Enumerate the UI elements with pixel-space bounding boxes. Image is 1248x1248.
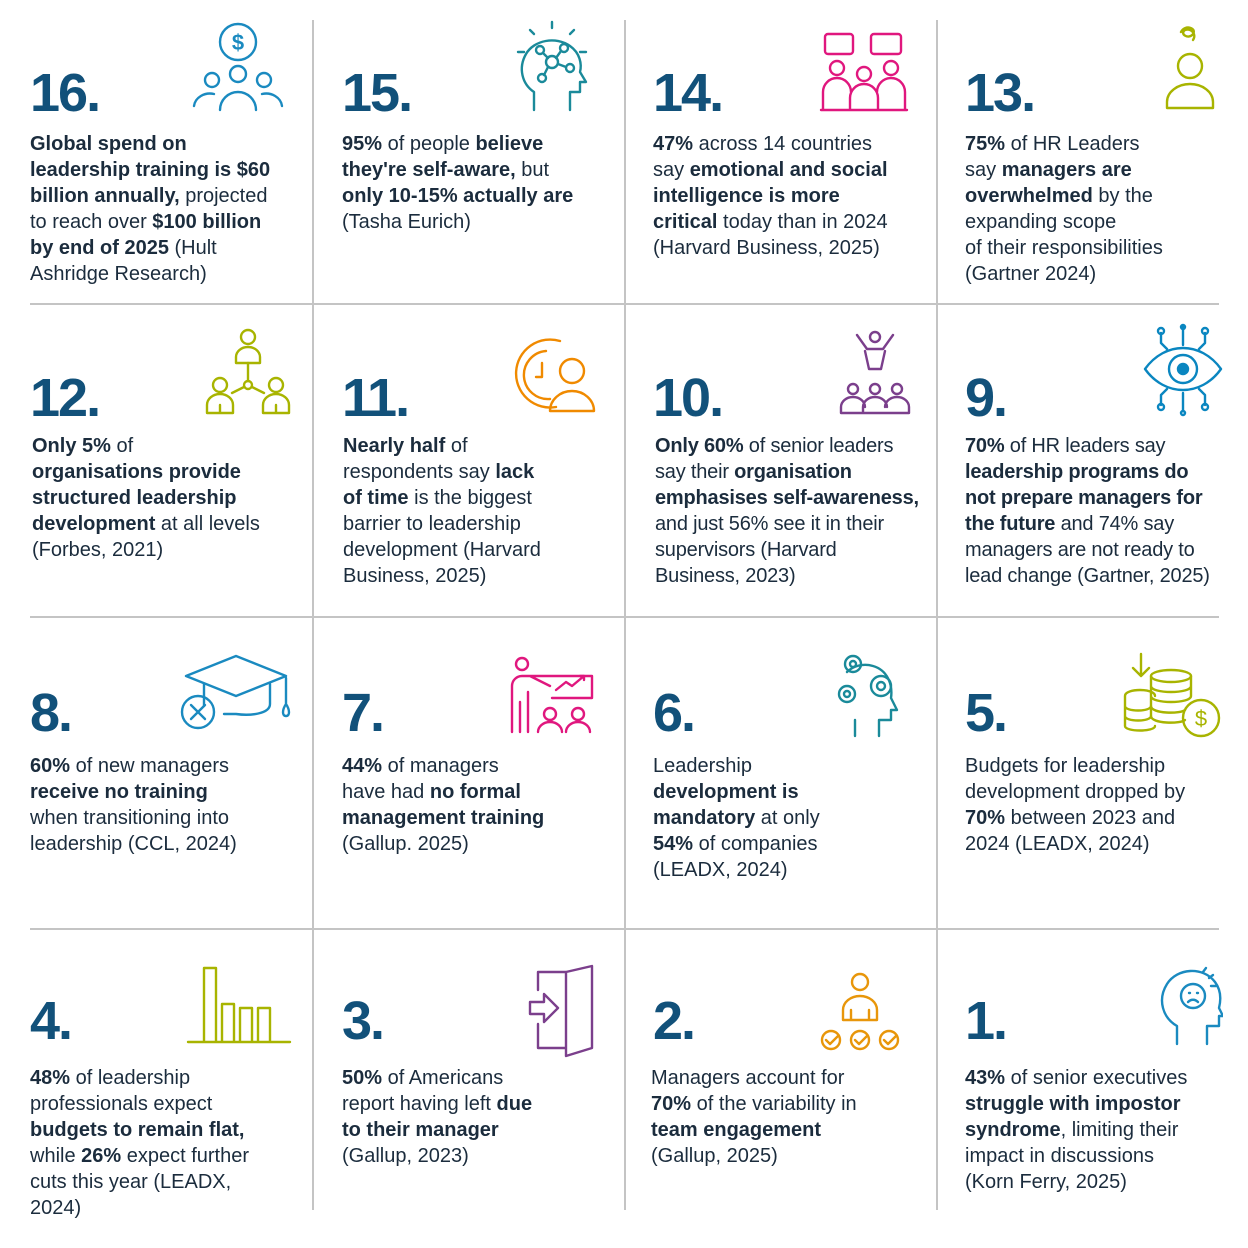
text 9: 70% of HR leaders say (965, 435, 1165, 457)
number 6: 6. (653, 683, 694, 743)
text 6: Leadership (653, 755, 752, 777)
panel: 13 (965, 26, 1214, 285)
number 13: 13. (965, 63, 1034, 123)
text 14: 47% across 14 countries (653, 133, 872, 155)
text 5: 2024 (LEADX, 2024) (965, 833, 1150, 855)
text 6: mandatory at only (653, 807, 820, 829)
icon: exit door (526, 964, 596, 1058)
number 8: 8. (30, 683, 71, 743)
icon: clock and person (514, 338, 596, 412)
text 12: development at all levels (32, 513, 260, 535)
icon: people with dollar (192, 22, 284, 112)
text 1: struggle with impostor (965, 1093, 1181, 1115)
text 9: managers are not ready to (965, 539, 1195, 561)
panel: 15 (342, 20, 588, 233)
text 11 (343, 435, 541, 587)
text 7 (342, 755, 544, 855)
text 15: 95% of people believe (342, 133, 543, 155)
icon: leader above team (840, 330, 910, 414)
icon: presentation (510, 656, 594, 734)
text 13: say managers are (965, 159, 1132, 181)
panel: 5 (965, 652, 1220, 855)
panel: 4 (30, 966, 292, 1219)
text 11: barrier to leadership (343, 513, 521, 535)
number 12: 12. (30, 368, 99, 428)
text 13: 75% of HR Leaders (965, 133, 1140, 155)
text 12: (Forbes, 2021) (32, 539, 163, 561)
text 5: 70% between 2023 and (965, 807, 1175, 829)
icon: hierarchy (206, 328, 290, 414)
text 1: impact in discussions (965, 1145, 1154, 1167)
text 4: professionals expect (30, 1093, 212, 1115)
text 10: Business, 2023) (655, 565, 795, 587)
number 9: 9. (965, 368, 1006, 428)
icon: people with dollar: $ (232, 30, 244, 55)
number 4: 4. (30, 991, 71, 1051)
text 4: budgets to remain flat, (30, 1119, 244, 1141)
text 10 (655, 435, 919, 587)
icon: coins: $ (1195, 706, 1207, 731)
icon: bar chart (186, 966, 292, 1044)
text 12: organisations provide (32, 461, 241, 483)
text 10: Only 60% of senior leaders (655, 435, 893, 457)
text 10: supervisors (Harvard (655, 539, 837, 561)
text 11: respondents say lack (343, 461, 534, 483)
text 8: leadership (CCL, 2024) (30, 833, 237, 855)
text 5: Budgets for leadership (965, 755, 1165, 777)
text 15: they're self-aware, but (342, 159, 549, 181)
text 14: intelligence is more (653, 185, 840, 207)
icon: coins (1124, 652, 1220, 738)
panel: 1 (965, 948, 1235, 1228)
text 16: by end of 2025 (Hult (30, 237, 217, 259)
text 11: of time is the biggest (343, 487, 532, 509)
text 9: lead change (Gartner, 2025) (965, 565, 1210, 587)
text 6: 54% of companies (653, 833, 818, 855)
text 16: billion annually, projected (30, 185, 267, 207)
text 8: 60% of new managers (30, 755, 229, 777)
text 4: 48% of leadership (30, 1067, 190, 1089)
icon: worried head (1157, 960, 1223, 1046)
text 3: 50% of Americans (342, 1067, 503, 1089)
icon: overwhelmed person (1166, 26, 1214, 110)
text 1 (965, 1065, 1187, 1195)
number 10: 10. (653, 368, 722, 428)
panel: 11 (342, 338, 596, 587)
text 3 (342, 1065, 532, 1169)
text 13: overwhelmed by the (965, 185, 1153, 207)
text 1: 43% of senior executives (965, 1067, 1187, 1089)
icon: head with gears (838, 654, 898, 738)
panel: 7 (342, 656, 594, 855)
text 12: Only 5% of (32, 435, 133, 457)
panel: 6 (653, 654, 898, 881)
text 11: Business, 2025) (343, 565, 486, 587)
icon: head network (516, 20, 588, 112)
text 15: (Tasha Eurich) (342, 211, 471, 233)
text 4 (30, 1067, 249, 1219)
text 2: team engagement (651, 1119, 821, 1141)
text 3: to their manager (342, 1119, 499, 1141)
text 13: of their responsibilities (965, 237, 1163, 259)
text 10: say their organisation (655, 461, 852, 483)
text 10: emphasises self-awareness, (655, 487, 919, 509)
text 8: when transitioning into (30, 807, 229, 829)
text 5 (965, 755, 1185, 855)
text 6: development is (653, 781, 799, 803)
text 4: cuts this year (LEADX, (30, 1171, 231, 1193)
text 3: (Gallup, 2023) (342, 1145, 469, 1167)
icon: eye (1144, 324, 1222, 416)
text 4: while 26% expect further (30, 1145, 249, 1167)
panel: 14 (653, 32, 908, 259)
text 13: (Gartner 2024) (965, 263, 1096, 285)
text 10: and just 56% see it in their (655, 513, 884, 535)
panel: 8 (30, 654, 290, 855)
text 2 (651, 1065, 857, 1169)
panel: 16 (30, 22, 284, 285)
text 7: (Gallup. 2025) (342, 833, 469, 855)
text 15: only 10-15% actually are (342, 185, 573, 207)
text 1: syndrome, limiting their (965, 1119, 1178, 1141)
icon: people talking (820, 32, 908, 112)
panel: 12 (30, 328, 290, 561)
text 16: to reach over $100 billion (30, 211, 261, 233)
text 11: development (Harvard (343, 539, 541, 561)
number 2: 2. (653, 991, 694, 1051)
text 7: management training (342, 807, 544, 829)
text 15 (342, 133, 573, 233)
text 9: not prepare managers for (965, 487, 1202, 509)
text 2: 70% of the variability in (651, 1093, 857, 1115)
number 5: 5. (965, 683, 1006, 743)
number 15: 15. (342, 63, 411, 123)
number 3: 3. (342, 991, 383, 1051)
panel: 9 (965, 324, 1222, 587)
text 14: (Harvard Business, 2025) (653, 237, 880, 259)
text 14 (653, 133, 888, 259)
text 11: Nearly half of (343, 435, 468, 457)
text 4: 2024) (30, 1197, 81, 1219)
text 13: expanding scope (965, 211, 1116, 233)
text 2: (Gallup, 2025) (651, 1145, 778, 1167)
text 9 (965, 435, 1210, 587)
number 11: 11. (342, 368, 408, 428)
text 7: have had no formal (342, 781, 521, 803)
text 16: leadership training is $60 (30, 159, 270, 181)
panel: 3 (342, 964, 594, 1167)
text 14: say emotional and social (653, 159, 888, 181)
text 8: receive no training (30, 781, 208, 803)
text 9: leadership programs do (965, 461, 1188, 483)
text 3: report having left due (342, 1093, 532, 1115)
text 6: (LEADX, 2024) (653, 859, 788, 881)
panel: 2 (653, 948, 923, 1228)
text 16 (30, 133, 270, 285)
text 9: the future and 74% say (965, 513, 1174, 535)
number 16: 16. (30, 63, 99, 123)
panel: 10 (653, 330, 919, 587)
number 7: 7. (342, 683, 383, 743)
text 5: development dropped by (965, 781, 1185, 803)
text 12: structured leadership (32, 487, 237, 509)
icon: graduation cap with x (180, 654, 290, 730)
text 12 (32, 435, 260, 561)
text 1: (Korn Ferry, 2025) (965, 1171, 1127, 1193)
text 14: critical today than in 2024 (653, 211, 888, 233)
text 16: Ashridge Research) (30, 263, 207, 285)
number 1: 1. (965, 991, 1006, 1051)
text 2: Managers account for (651, 1067, 844, 1089)
number 14: 14. (653, 63, 722, 123)
text 13 (965, 133, 1163, 285)
text 8 (30, 755, 237, 855)
icon: person with checkmarks (819, 970, 901, 1052)
text 16: Global spend on (30, 133, 187, 155)
text 6 (653, 755, 820, 881)
text 7: 44% of managers (342, 755, 499, 777)
